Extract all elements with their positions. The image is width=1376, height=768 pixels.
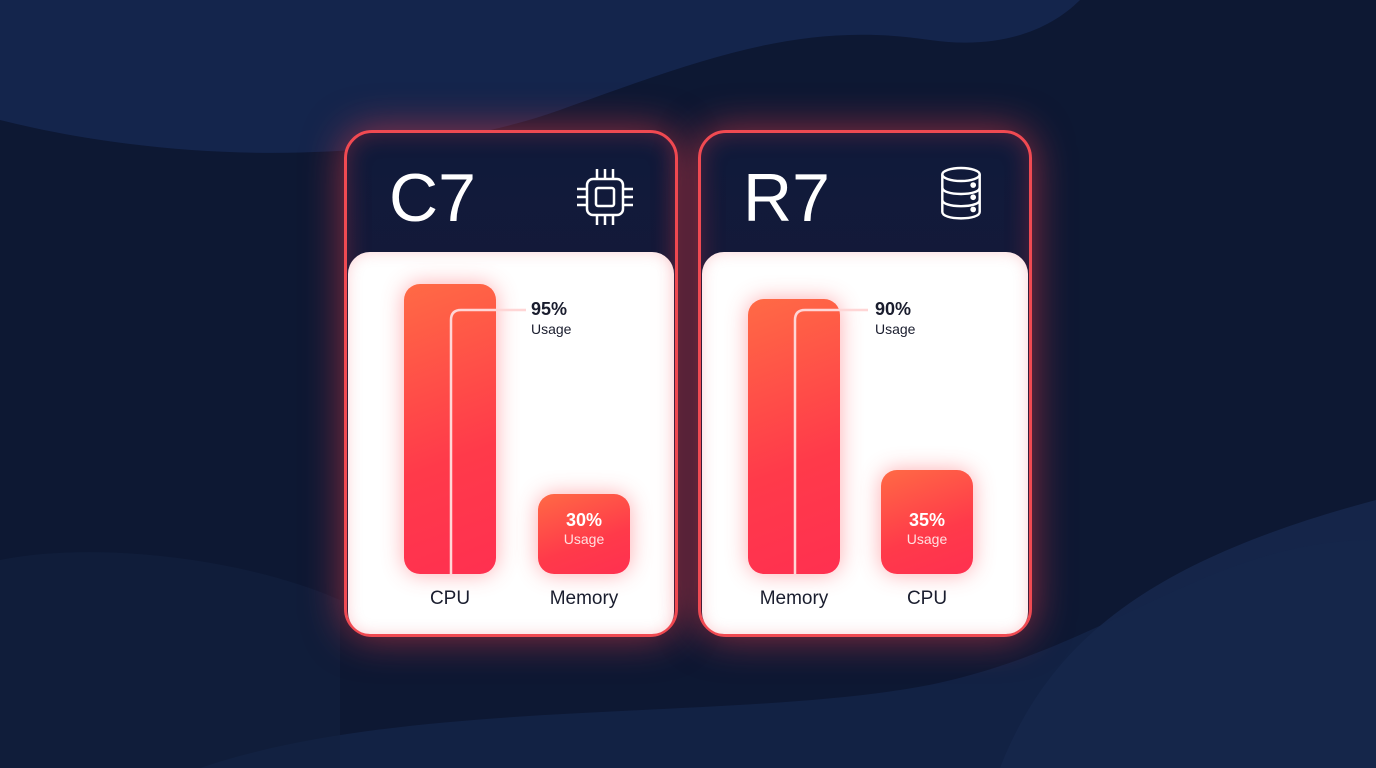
icon: database: [941, 166, 981, 220]
panel: chart R7: Usage: [875, 321, 915, 337]
bar: Memory 30%: 30%: [566, 510, 602, 530]
card: R7: [698, 130, 1032, 637]
panel: chart C7: 95%: [531, 299, 567, 319]
bar: Memory 30%: Usage: [564, 531, 604, 547]
panel: chart R7: [702, 252, 1028, 634]
bar: CPU 95%: [404, 284, 496, 574]
bar: CPU 35%: [881, 470, 973, 574]
panel: chart R7: 90%: [875, 299, 911, 319]
bar: Memory 30%: [538, 494, 630, 574]
bar: CPU 35%: Usage: [907, 531, 947, 547]
panel: chart C7: Usage: [531, 321, 571, 337]
callout line: [794, 308, 868, 574]
label: CPU: CPU: [430, 588, 470, 609]
bar: CPU 35%: 35%: [909, 510, 945, 530]
card: C7: [344, 130, 678, 637]
label: 95% usage: [531, 299, 571, 337]
title: C7: C7: [389, 160, 476, 236]
label: Memory: Memory: [760, 588, 828, 609]
bar: Memory 90%: [748, 299, 840, 574]
label: Memory: Memory: [550, 588, 618, 609]
label: 90% usage: [875, 299, 915, 337]
icon: chip: [577, 169, 633, 225]
label: CPU: CPU: [907, 588, 947, 609]
title: R7: R7: [743, 160, 830, 236]
panel: chart C7: [348, 252, 674, 634]
callout line: [450, 308, 526, 574]
